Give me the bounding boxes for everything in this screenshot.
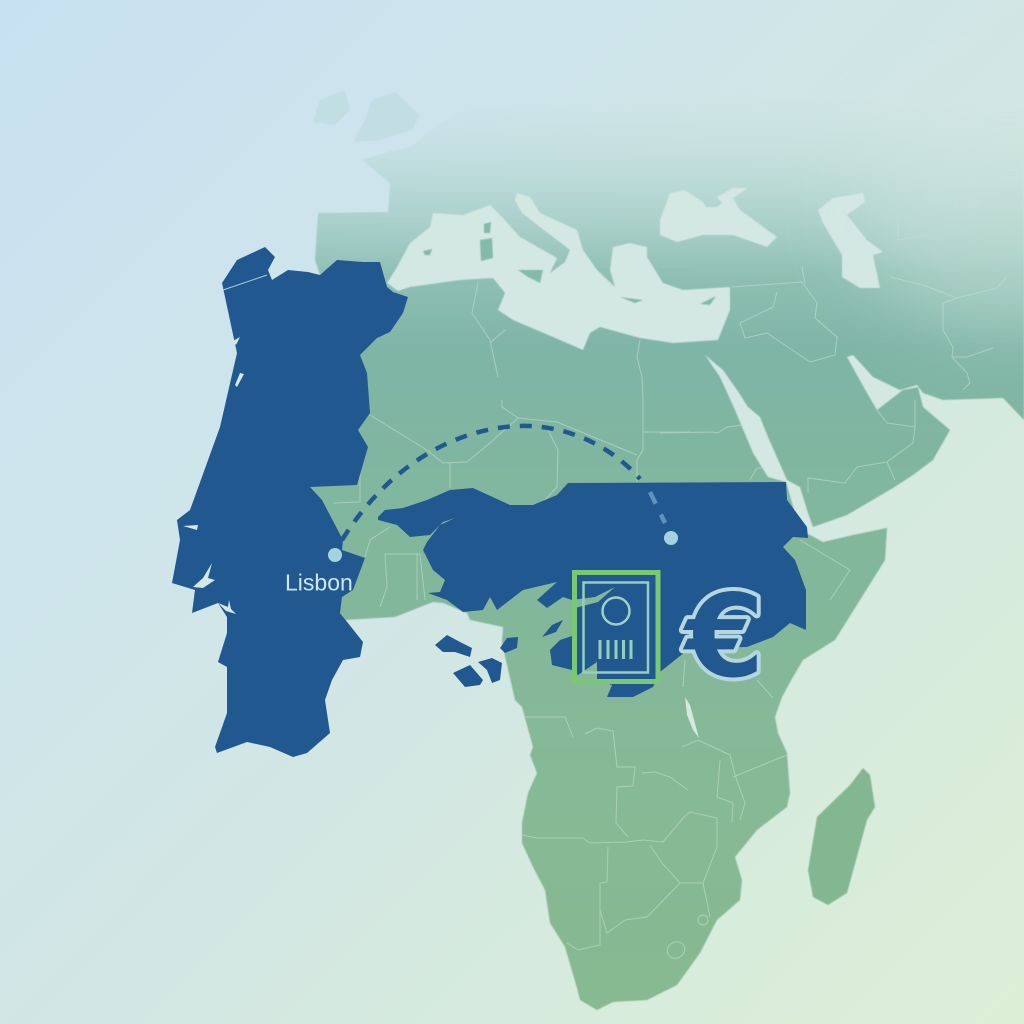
land mass — [300, 90, 1024, 1010]
caspian sea — [818, 193, 883, 288]
lisbon label: Lisbon — [285, 570, 353, 596]
north east fade — [860, 90, 1024, 330]
seas — [387, 188, 883, 350]
small blue islands — [435, 620, 563, 687]
madagascar — [808, 768, 875, 905]
black sea — [660, 188, 777, 247]
lisbon marker — [328, 548, 342, 562]
country borders — [333, 210, 1007, 961]
mediterranean sea — [387, 193, 730, 350]
central blue silhouette — [378, 482, 808, 697]
mediterranean islands — [423, 222, 716, 305]
british isles — [313, 90, 420, 142]
dashed route arc — [342, 426, 665, 540]
document icon — [574, 572, 658, 682]
portugal silhouette — [172, 247, 408, 757]
northern border line — [223, 275, 267, 290]
portugal coastal inlets — [183, 337, 244, 614]
euro icon: € — [682, 570, 764, 703]
lake tanganyika — [685, 697, 699, 738]
destination marker — [664, 531, 678, 545]
